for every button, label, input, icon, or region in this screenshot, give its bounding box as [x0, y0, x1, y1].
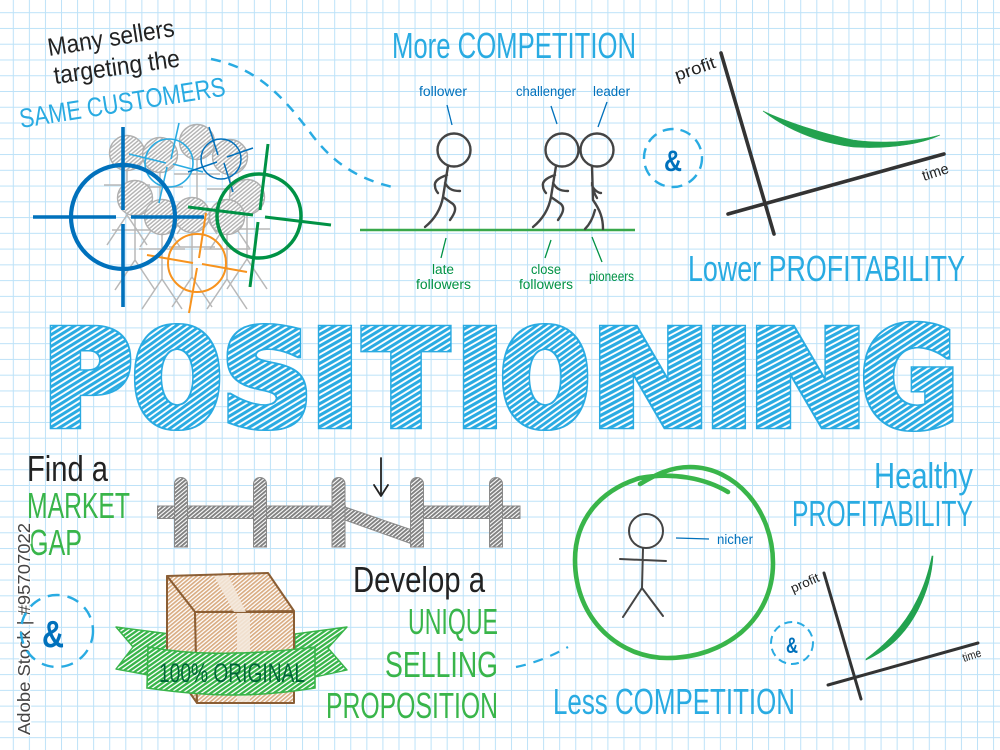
cardboard box — [167, 573, 294, 703]
title: POSITIONING: T — [364, 303, 448, 456]
title: POSITIONING: O — [133, 303, 222, 456]
ribbon text: 100% ORIGINAL — [159, 658, 305, 688]
heading: many sellers targeting the same customers: targeting the — [52, 45, 182, 90]
title: POSITIONING: I — [310, 304, 360, 456]
illustration: original product box with ribbon — [116, 573, 347, 703]
figure: nicher — [620, 514, 666, 617]
heading: more competition: More COMPETITION — [392, 25, 636, 66]
title: POSITIONING: I — [455, 304, 505, 456]
heading: less competition: Less COMPETITION — [553, 681, 795, 722]
heading: develop a unique selling proposition: UNIQUE — [408, 601, 498, 642]
ribbon band — [147, 647, 315, 695]
icon: ampersand badge top — [644, 129, 702, 187]
label: nicher: nicher — [717, 531, 753, 547]
labels: positions above: challenger — [516, 84, 576, 99]
figure: challenger — [533, 134, 578, 227]
icon: ampersand badge left — [21, 595, 93, 667]
heading: find a market gap: GAP — [29, 522, 82, 563]
chart: lower profitability — [672, 53, 951, 234]
title: POSITIONING: N — [748, 304, 868, 456]
panel: less competition niche — [553, 467, 795, 722]
labels: positions below: pioneers — [589, 269, 634, 284]
title: POSITIONING — [43, 300, 958, 457]
heading: healthy profitability: Healthy — [874, 455, 973, 496]
title: POSITIONING: I — [704, 304, 754, 456]
title: POSITIONING: G — [861, 300, 958, 457]
icon: ampersand badge top: & — [664, 145, 682, 178]
chart: lower profitability: time — [920, 160, 951, 185]
arrow: gap pointer — [374, 458, 388, 496]
labels: positions below: followers — [519, 277, 573, 292]
dashed connector: bottom — [516, 647, 568, 667]
watermark: stock id: Adobe Stock | #95707022 — [14, 523, 34, 735]
dashed connector: top — [211, 59, 397, 188]
heading: develop a unique selling proposition: Develop a — [353, 559, 486, 600]
label: nicher — [676, 531, 753, 547]
labels: positions below: late — [432, 262, 454, 277]
target: dark blue small — [188, 127, 253, 192]
panel: more competition — [360, 25, 636, 292]
heading: find a market gap: MARKET — [27, 485, 130, 526]
target: light blue — [129, 123, 203, 203]
ribbon tails — [116, 627, 347, 677]
niche circle — [575, 467, 773, 658]
chart: healthy profitability: time — [961, 646, 983, 665]
panel: many sellers same customers — [17, 14, 331, 313]
target: green — [188, 144, 331, 287]
target: large blue — [33, 127, 204, 307]
figure: leader — [580, 134, 614, 229]
heading: develop a unique selling proposition: PROPOSITION — [326, 685, 498, 726]
title: POSITIONING: S — [222, 304, 312, 456]
chart: lower profitability: profit — [672, 53, 718, 85]
illustration: fence with gap — [158, 458, 520, 547]
heading: many sellers targeting the same customers — [17, 14, 227, 134]
icon: ampersand badge right: & — [786, 633, 798, 658]
ground line — [360, 229, 635, 231]
figure: follower — [425, 134, 470, 227]
labels: positions above: leader — [593, 84, 630, 99]
heading: develop a unique selling proposition: SELLING — [385, 644, 498, 685]
icon: ampersand badge left: & — [42, 614, 64, 656]
heading: develop a unique selling proposition — [326, 559, 498, 726]
labels: positions above — [419, 84, 630, 127]
labels: positions above: follower — [419, 84, 468, 99]
title: POSITIONING: P — [43, 304, 132, 456]
target: orange — [147, 213, 247, 313]
icon: ampersand badge right — [771, 622, 813, 664]
labels: positions below: close — [531, 262, 561, 277]
chart: healthy profitability: profit — [788, 570, 822, 596]
heading: healthy profitability — [792, 455, 973, 534]
labels: positions below — [416, 237, 634, 292]
crowd of stick people — [104, 124, 270, 309]
title: POSITIONING: N — [591, 304, 711, 456]
labels: positions below: followers — [416, 277, 471, 292]
heading: find a market gap: Find a — [27, 448, 109, 489]
heading: many sellers targeting the same customers: SAME CUSTOMERS — [17, 72, 227, 134]
heading: many sellers targeting the same customers: Many sellers — [46, 14, 176, 62]
chart: healthy profitability — [788, 556, 983, 699]
heading: find a market gap — [27, 448, 130, 563]
title: POSITIONING: O — [501, 303, 590, 456]
